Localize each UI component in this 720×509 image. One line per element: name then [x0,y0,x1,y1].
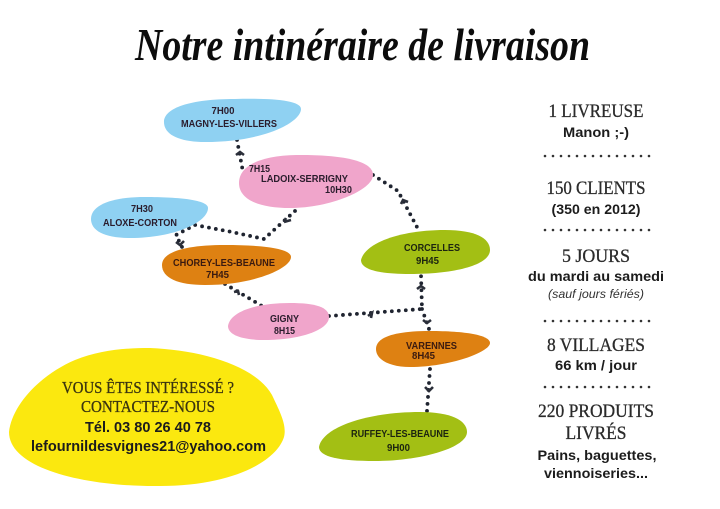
figure: 150 clients [546,178,646,217]
stop: Ladoix-Serrigny: LADOIX-SERRIGNY [261,174,348,185]
route map [91,99,490,461]
figure: 5 jours: (sauf jours fériés) [548,287,644,301]
figure: 220 produits: LIVRÉS [566,422,626,444]
figure: 5 jours [528,246,664,301]
figure: 1 livreuse: Manon ;-) [563,124,629,140]
stop: Corcelles: 9H45 [416,256,439,267]
stop: Gigny [228,303,329,340]
figure: 5 jours: 5 JOURS [562,246,630,267]
stop: Chorey-lès-Beaune: 7H45 [206,270,229,281]
stop: Ruffey-lès-Beaune: RUFFEY-LES-BEAUNE [351,429,449,440]
contact callout [9,348,285,486]
stop: Ruffey-lès-Beaune [319,412,467,461]
figure: 8 villages: 8 VILLAGES [547,335,645,356]
title: Notre intinéraire de livraison [134,19,590,70]
figure: 1 livreuse: 1 LIVREUSE [548,101,644,122]
stop: Aloxe-Corton: ALOXE-CORTON [103,218,177,229]
stop: Magny-lès-Villers: MAGNY-LES-VILLERS [181,119,277,130]
route arrowheads [176,152,433,391]
contact callout: Tél. 03 80 26 40 78 [85,419,211,436]
figure: 220 produits: 220 PRODUITS [538,401,654,422]
contact callout: lefournildesvignes21@yahoo.com [31,438,266,455]
key figures column [528,101,664,481]
stop: Varennes: VARENNES [406,341,457,352]
stop: Ladoix-Serrigny: 7H15 [249,164,270,175]
stop: Ladoix-Serrigny: 10H30 [325,185,352,196]
stop: Ladoix-Serrigny [239,155,373,208]
stop: Chorey-lès-Beaune: CHOREY-LES-BEAUNE [173,258,275,269]
stop: Gigny: 8H15 [274,326,295,337]
stop: Magny-lès-Villers: 7H00 [212,106,235,117]
stop: Varennes [376,331,490,367]
stop: Gigny: GIGNY [270,314,299,325]
stop: Magny-lès-Villers [164,99,301,142]
figure: 5 jours: du mardi au samedi [528,268,664,284]
figure: 8 villages: 66 km / jour [555,357,638,373]
figure: 220 produits: viennoiseries... [544,465,648,481]
figure: 150 clients: (350 en 2012) [552,201,640,217]
contact callout: VOUS ÊTES INTÉRESSÉ ? [62,378,234,397]
figure: 8 villages [547,335,645,373]
figure: 150 clients: 150 CLIENTS [546,178,646,199]
stop: Ruffey-lès-Beaune: 9H00 [387,443,410,454]
figure: 220 produits: Pains, baguettes, [538,447,656,463]
stop: Aloxe-Corton [91,197,208,238]
figure: 220 produits [538,401,656,481]
stop: Varennes: 8H45 [412,351,435,362]
stop: Corcelles: CORCELLES [404,243,460,254]
figure: 1 livreuse [548,101,644,140]
contact callout: CONTACTEZ-NOUS [81,397,215,416]
stop: Chorey-lès-Beaune [162,245,291,285]
stop: Corcelles [361,230,490,274]
stop: Aloxe-Corton: 7H30 [131,204,153,215]
dotted route lines [176,140,430,411]
